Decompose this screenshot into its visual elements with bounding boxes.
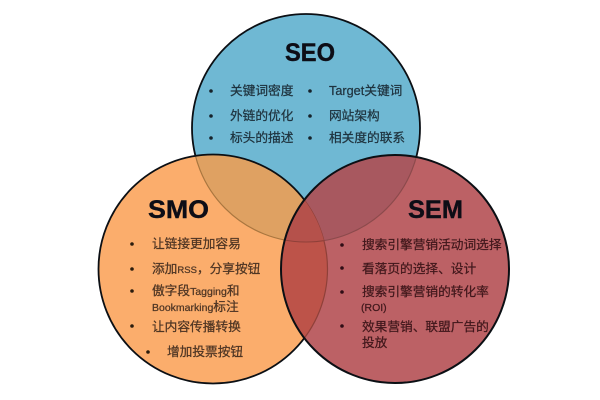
list: SEO left column: 标头的描述 (230, 130, 294, 145)
list: SEM items (340, 238, 502, 350)
list: SMO items: 增加投票按钮 (167, 344, 243, 359)
list: SEM items: 搜索引擎营销活动词选择 (362, 238, 502, 252)
list: SEM items: (ROI) (361, 302, 387, 314)
list: SEO right column: 相关度的联系 (329, 130, 405, 145)
heading: SEM: SEM (408, 196, 463, 224)
list: SEO left column: 外链的优化 (230, 108, 294, 123)
panel: SEO text (209, 39, 405, 145)
list: SEO right column (308, 84, 405, 145)
list: SEM items: 看落页的选择、设计 (362, 261, 476, 276)
list: SMO items (130, 236, 261, 359)
list: SEO left column: 关键词密度 (230, 83, 294, 98)
list: SEM items: 效果营销、联盟广告的 (362, 319, 489, 334)
list: SMO items: 傲字段Tagging和 (152, 284, 240, 298)
list: SEO left column (209, 83, 294, 145)
list: SMO items: 让内容传播转换 (152, 319, 241, 334)
list: SEM items: 搜索引擎营销的转化率 (362, 284, 489, 299)
circle: SEO (192, 14, 420, 242)
list: SEO right column: 网站架构 (329, 109, 380, 123)
list: SEO right column: Target关键词 (329, 84, 402, 98)
heading: SMO: SMO (148, 196, 209, 224)
list: SMO items: 让链接更加容易 (152, 236, 241, 251)
list: SMO items: 添加RSS，分享按钮 (152, 261, 261, 276)
list: SMO items: Bookmarking标注 (152, 300, 239, 314)
heading: SEO: SEO (285, 39, 335, 67)
panel: SMO text (130, 196, 261, 359)
circle: SEM (280, 154, 510, 384)
venn diagram (98, 13, 510, 384)
circle: SMO (98, 154, 304, 384)
panel: SEM text (340, 196, 502, 350)
list: SEM items: 投放 (362, 335, 388, 350)
